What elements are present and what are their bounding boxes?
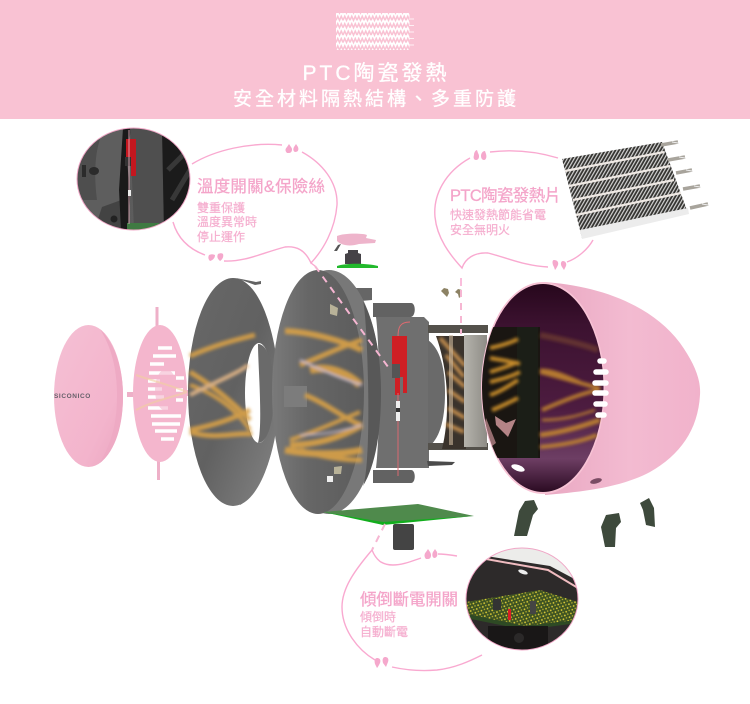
circle outline	[77, 128, 190, 230]
dashed connector lines	[315, 266, 461, 550]
quote mark	[424, 549, 437, 559]
quote mark	[375, 657, 388, 668]
quote mark	[552, 260, 566, 270]
title: PTC陶瓷發熱	[302, 62, 450, 85]
bubble text: 雙重保護	[197, 200, 245, 215]
circular detail: tilt switch	[465, 547, 580, 652]
funnel hole	[245, 343, 273, 443]
brand label: SICONICO	[54, 393, 91, 400]
speech bubble: thermostat and fuse	[173, 144, 337, 266]
airflow rear	[285, 331, 362, 460]
PTC ceramic plate	[562, 142, 708, 239]
rear funnel	[272, 270, 381, 514]
front cap	[54, 325, 123, 467]
bubble text: 自動斷電	[360, 625, 408, 639]
bubble text: 傾倒時	[360, 610, 396, 624]
top switch assembly	[334, 234, 378, 268]
small screws	[441, 288, 462, 298]
bubble heading: PTC陶瓷發熱片	[450, 186, 561, 205]
circular detail: thermostat	[76, 127, 191, 232]
speech bubble: tilt switch	[342, 549, 482, 671]
quote mark	[286, 144, 298, 153]
subtitle: 安全材料隔熱結構、多重防護	[233, 88, 516, 110]
quote mark	[474, 150, 486, 160]
grille	[127, 307, 194, 480]
funnel housing	[188, 278, 280, 506]
circuit board	[323, 504, 474, 550]
main shell	[481, 282, 700, 495]
bubble text: 停止運作	[197, 229, 245, 244]
bubble text: 溫度異常時	[197, 214, 257, 229]
wire	[398, 322, 410, 337]
silver heater plate	[464, 335, 487, 447]
airflow front	[190, 335, 255, 436]
circle outline	[466, 548, 578, 650]
housing interior	[482, 327, 600, 473]
icon: PTC ceramic heater	[336, 13, 414, 50]
bubble heading: 傾倒斷電開關	[360, 590, 458, 609]
heat fins	[436, 336, 466, 449]
speech bubble: PTC ceramic plate	[435, 150, 593, 286]
quote mark	[208, 253, 223, 261]
red thermostat	[392, 336, 407, 395]
bubble text: 安全無明火	[450, 222, 510, 237]
bubble text: 快速發熱節能省電	[450, 207, 546, 222]
bubble heading: 溫度開關&保險絲	[197, 177, 325, 196]
header banner	[0, 0, 750, 119]
vent slots	[595, 361, 606, 415]
motor body	[363, 301, 488, 486]
rubber feet	[514, 498, 655, 547]
fuse	[397, 393, 399, 476]
